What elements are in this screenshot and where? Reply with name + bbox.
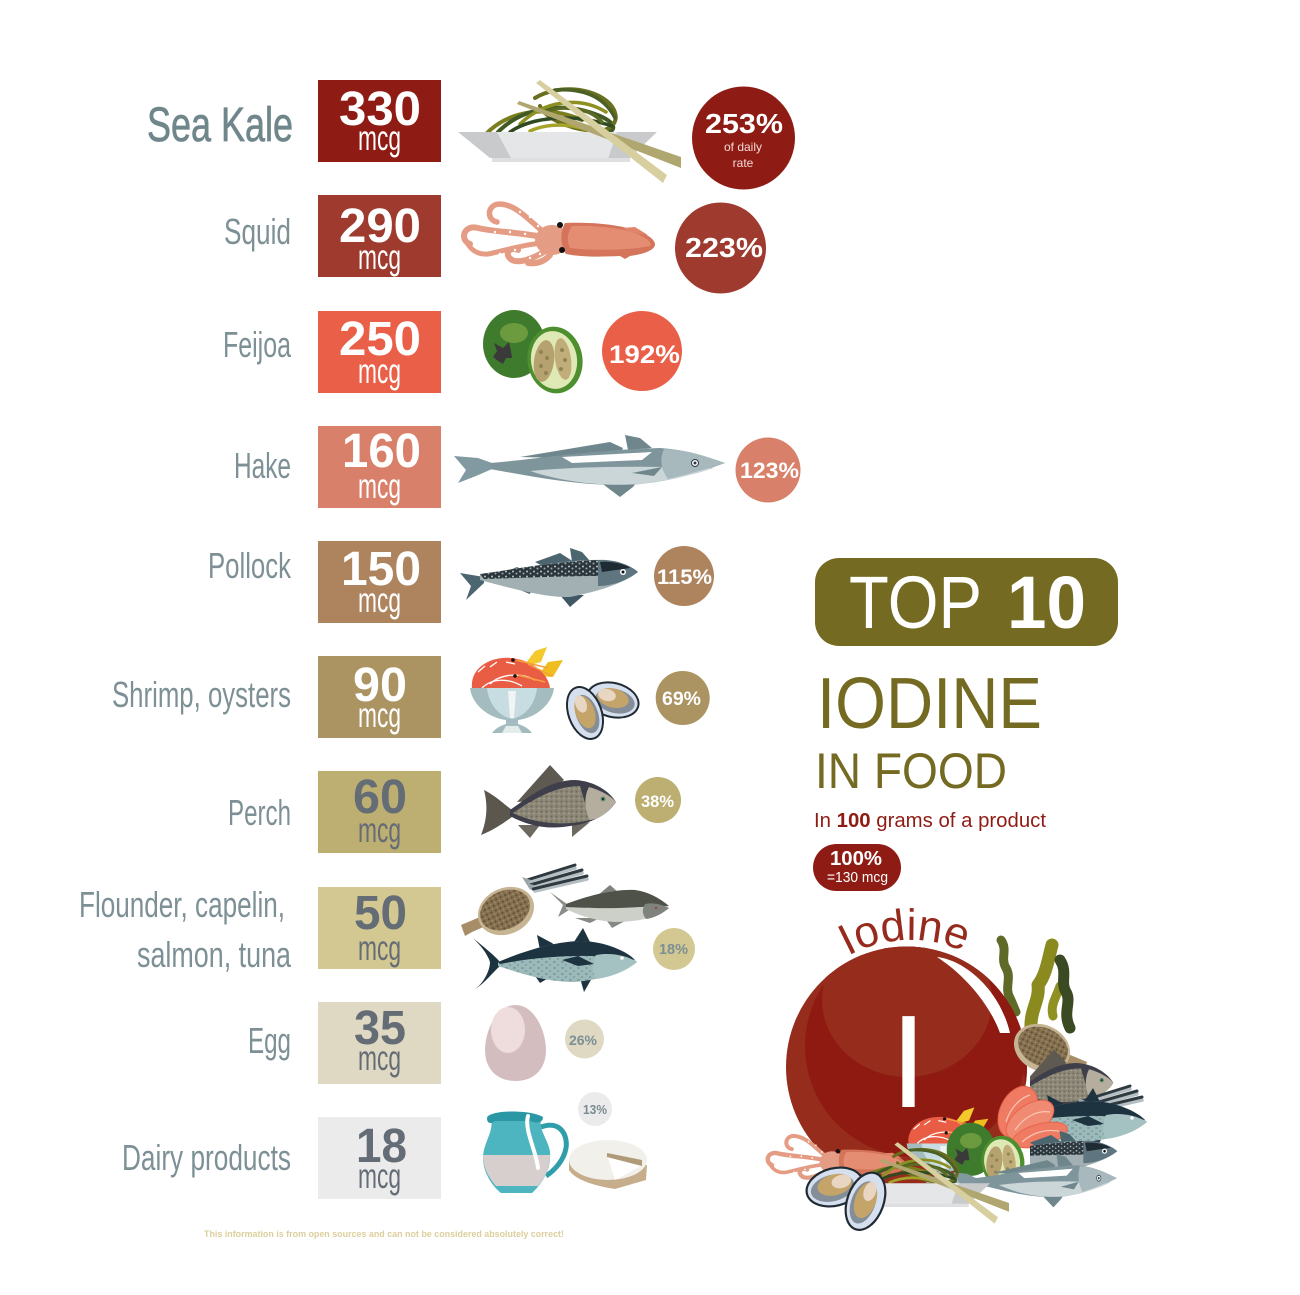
value box: 160 mcg: mcg: [358, 467, 401, 506]
row: Shrimp, oysters: [112, 647, 710, 745]
title block: [813, 558, 1118, 891]
legend pill: 100% = 130 mcg: [813, 844, 901, 891]
label: Feijoa: Feijoa: [223, 324, 292, 365]
value box: 90 mcg: mcg: [358, 696, 401, 735]
row: Flounder, capelin, salmon, tuna: [79, 865, 695, 992]
icon: oysters: [559, 676, 644, 745]
pill: TOP 10: [815, 558, 1118, 646]
label: Hake: Hake: [234, 445, 291, 486]
footnote: This information is from open sources and can not be considered absolutely correct!: [204, 1229, 564, 1240]
icon: sea kale on plate with chopsticks: [458, 80, 681, 183]
value box: 60 mcg: mcg: [358, 811, 401, 850]
percent badge: 123%: 123%: [740, 458, 799, 483]
icon: perch: [481, 765, 616, 838]
icon: squid: [464, 204, 655, 263]
element symbol: I: I: [890, 988, 927, 1135]
pill: TOP 10: 10: [1007, 561, 1086, 644]
icon: egg: [485, 1005, 546, 1081]
value box: 330 mcg: 330: [339, 83, 421, 136]
row: Sea Kale: [147, 80, 795, 190]
percent badge: 115%: [654, 546, 714, 606]
heading: IODINE: IODINE: [817, 664, 1042, 744]
value box: 35 mcg: 35: [354, 1002, 406, 1055]
heading: IN FOOD: IN FOOD: [815, 743, 1007, 799]
row: Egg: [248, 1002, 604, 1084]
cluster: flounder: [1006, 1015, 1087, 1081]
percent badge: 253% of daily rate: of daily: [724, 140, 762, 154]
value box: 330 mcg: [318, 80, 441, 162]
percent badge: 223%: [675, 202, 766, 294]
value box: 150 mcg: [318, 541, 441, 623]
percent badge: 38%: [635, 777, 681, 823]
row: Dairy products: [122, 1092, 647, 1199]
label: Pollock: Pollock: [208, 545, 292, 586]
icon: jug of milk: [483, 1111, 566, 1193]
iodine sphere: [786, 946, 1027, 1184]
percent badge: 192%: [602, 311, 682, 391]
cluster: hake: [953, 1154, 1117, 1207]
value box: 60 mcg: 60: [353, 771, 407, 824]
value box: 160 mcg: 160: [342, 425, 421, 478]
row: Perch: [228, 765, 681, 853]
subtitle: In 100 grams of a product: [814, 810, 1046, 832]
value box: 90 mcg: 90: [353, 659, 407, 712]
value box: 250 mcg: mcg: [358, 352, 401, 391]
label: Perch: Perch: [228, 792, 291, 833]
value box: 290 mcg: mcg: [358, 238, 401, 277]
value box: 250 mcg: [318, 311, 441, 393]
icon: pollock: [460, 548, 638, 607]
seaweed fronds: [1001, 940, 1070, 1028]
percent badge: 13%: [578, 1092, 612, 1126]
value box: 18 mcg: [318, 1117, 441, 1199]
value box: 18 mcg: mcg: [358, 1157, 401, 1196]
row: Squid: [224, 195, 766, 294]
food rows: [79, 80, 800, 1199]
percent badge: 26%: 26%: [569, 1033, 597, 1048]
cluster: sprats: [1077, 1086, 1142, 1112]
label: Flounder, capelin, salmon, tuna: [79, 884, 292, 975]
row: Feijoa: [223, 310, 682, 397]
label: Dairy products: Dairy products: [122, 1137, 291, 1178]
value box: 60 mcg: [318, 771, 441, 853]
percent badge: 123%: [736, 438, 800, 502]
label: Flounder, capelin, salmon, tuna: Flounder, capelin,: [79, 884, 285, 925]
icon: flounder: [461, 878, 542, 944]
percent badge: 38%: 38%: [641, 792, 674, 811]
cluster: tuna: [1047, 1088, 1147, 1142]
value box: 250 mcg: 250: [339, 313, 421, 366]
percent badge: 69%: [656, 671, 710, 725]
value box: 50 mcg: [318, 887, 441, 969]
percent badge: 18%: [653, 928, 695, 970]
icon: capelin: [522, 865, 587, 891]
icon: feijoa: [483, 310, 587, 397]
value box: 160 mcg: [318, 425, 441, 508]
icon: tuna: [473, 928, 637, 992]
percent badge: 13%: 13%: [583, 1103, 607, 1117]
cluster: squid: [768, 1136, 907, 1179]
icon: hake: [454, 435, 725, 497]
icon: shrimp in bowl: [470, 647, 563, 733]
legend pill: 100% = 130 mcg: =130 mcg: [827, 870, 888, 886]
percent badge: 253% of daily rate: [692, 86, 795, 190]
percent badge: 253% of daily rate: rate: [733, 156, 754, 170]
cluster: sea kale plate: [833, 1142, 1009, 1224]
label: Egg: Egg: [248, 1020, 291, 1061]
pill: TOP 10: TOP: [849, 561, 982, 644]
icon: cheese wheel: [569, 1140, 647, 1189]
percent badge: 223%: 223%: [685, 232, 763, 263]
row: Pollock: [208, 541, 714, 623]
value box: 290 mcg: 290: [339, 200, 421, 253]
cluster: salmon steaks: [990, 1080, 1070, 1153]
curved word: Iodine: [838, 908, 967, 954]
value box: 150 mcg: mcg: [358, 581, 401, 620]
percent badge: 69%: 69%: [662, 689, 701, 710]
curved word: Iodine: Iodine: [838, 908, 967, 954]
value box: 35 mcg: mcg: [358, 1039, 401, 1078]
label: Flounder, capelin, salmon, tuna: salmon, tuna: [137, 934, 292, 975]
value box: 150 mcg: 150: [341, 543, 421, 596]
cluster: oysters: [801, 1161, 894, 1237]
label: Sea Kale: Sea Kale: [147, 99, 293, 152]
cluster: shrimp: [907, 1107, 988, 1183]
cluster: feijoa: [947, 1123, 1028, 1191]
percent badge: 26%: [565, 1020, 604, 1058]
value box: 330 mcg: mcg: [358, 119, 401, 158]
icon: salmon: [550, 885, 669, 928]
label: Shrimp, oysters: Shrimp, oysters: [112, 674, 291, 715]
cluster: pollock: [1030, 1130, 1118, 1167]
legend pill: 100% = 130 mcg: 100%: [830, 848, 882, 870]
value box: 90 mcg: [318, 656, 441, 738]
percent badge: 115%: 115%: [657, 566, 712, 589]
cluster: perch: [1030, 1050, 1114, 1104]
illustration: iodine sphere with foods: [766, 908, 1147, 1231]
value box: 290 mcg: [318, 195, 441, 277]
value box: 35 mcg: [318, 1002, 441, 1084]
row: Hake: [234, 425, 800, 508]
value box: 50 mcg: mcg: [358, 929, 401, 968]
percent badge: 18%: 18%: [659, 941, 688, 958]
percent badge: 253% of daily rate: 253%: [705, 108, 783, 139]
percent badge: 192%: 192%: [609, 341, 680, 369]
label: Squid: Squid: [224, 211, 291, 252]
value box: 50 mcg: 50: [354, 887, 407, 940]
value box: 18 mcg: 18: [356, 1120, 407, 1173]
